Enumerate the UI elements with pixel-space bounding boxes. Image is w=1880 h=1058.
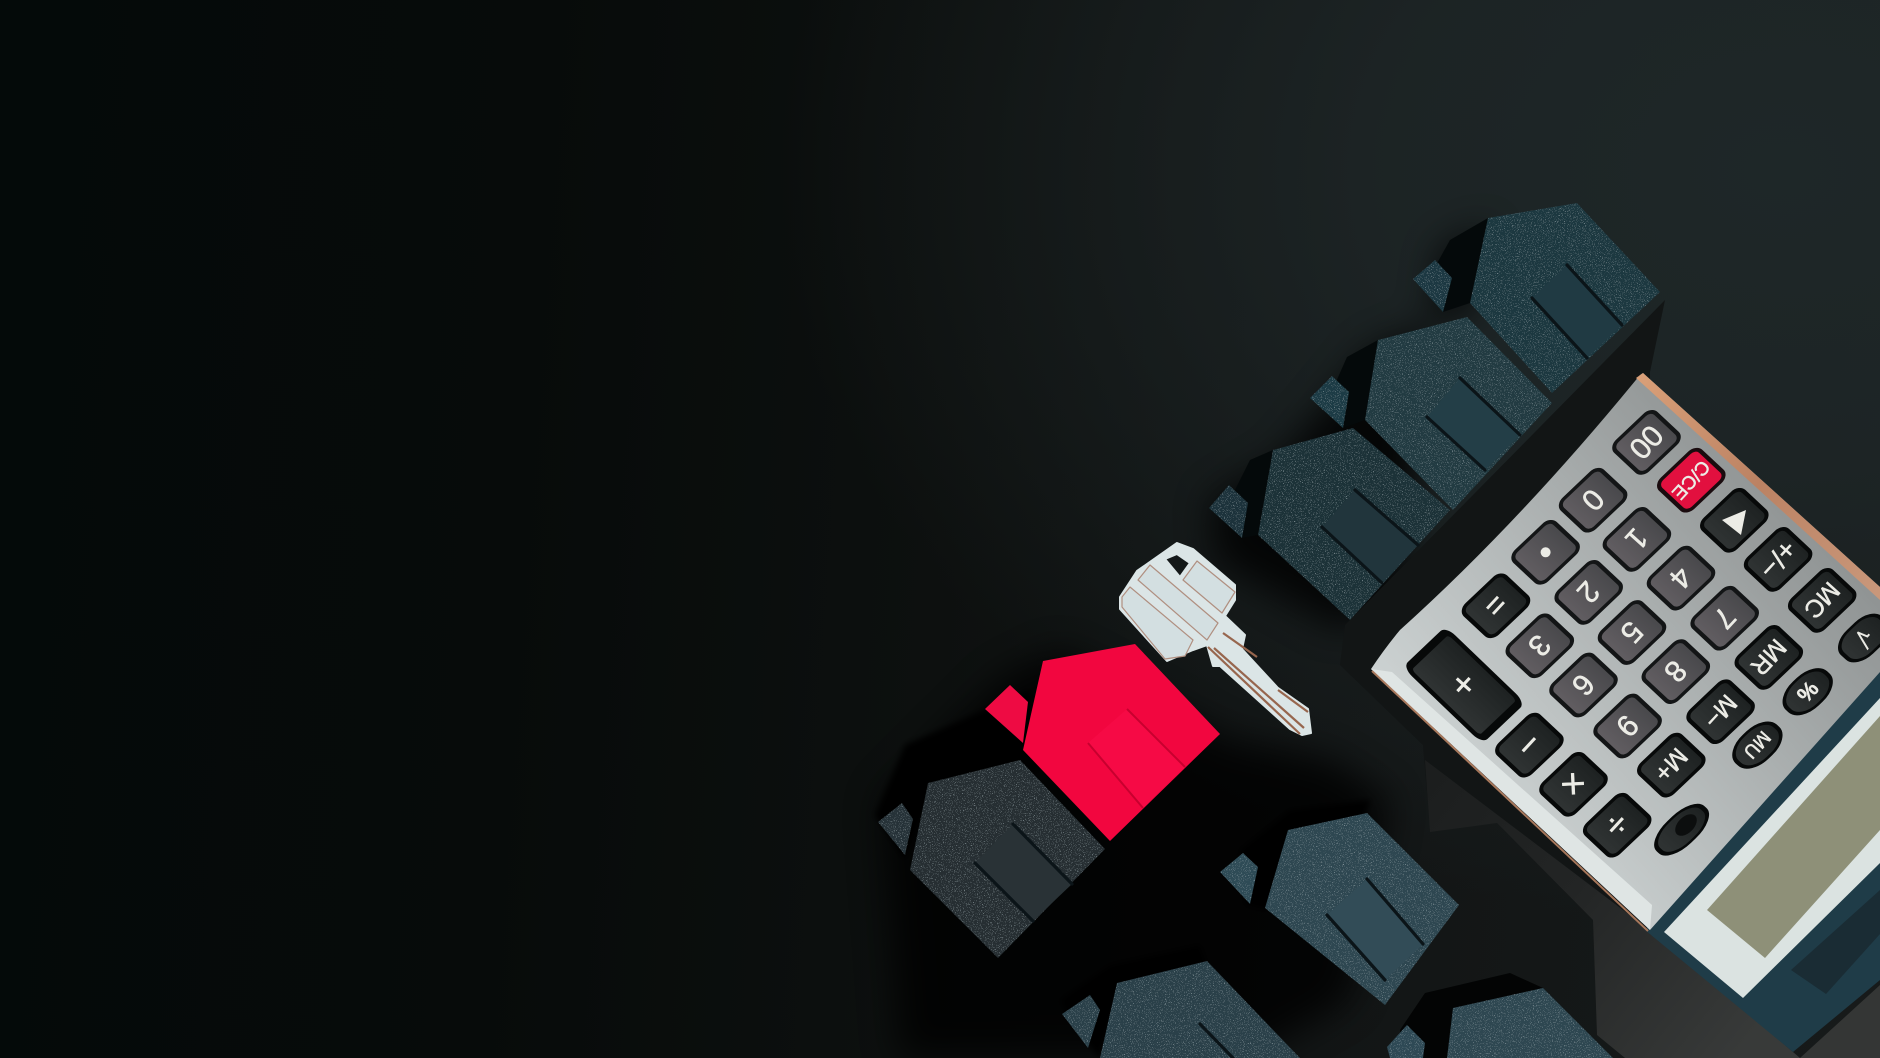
key: divide: ÷ <box>1595 804 1639 846</box>
key: 1: 1 <box>1618 522 1654 556</box>
key: divide <box>1582 792 1653 859</box>
key: 4: 4 <box>1662 560 1698 595</box>
key: 3 <box>1504 612 1575 679</box>
LCD display <box>1707 716 1880 958</box>
key: 1 <box>1601 506 1672 573</box>
model house: bottom centre <box>1062 961 1300 1058</box>
model house: top middle <box>1310 317 1552 510</box>
key: 7 <box>1689 585 1760 652</box>
house shadow: bottom right <box>1400 973 1543 1058</box>
key: MC: MC <box>1798 576 1845 624</box>
key: square root: √ <box>1848 624 1878 652</box>
key: run <box>1699 487 1770 554</box>
model house: middle right <box>1220 813 1459 1005</box>
key: 9: 9 <box>1609 708 1645 742</box>
key: C/CE <box>1656 447 1727 514</box>
model house: top left <box>1209 428 1450 620</box>
table surface under calculator <box>1425 760 1800 1058</box>
key: M- <box>1685 678 1756 745</box>
key: minus: − <box>1507 724 1552 766</box>
key: 5: 5 <box>1613 615 1649 649</box>
house shadow: lower left <box>875 690 1040 860</box>
key: times <box>1538 751 1609 818</box>
key: 8 <box>1640 638 1711 705</box>
display frame <box>1664 698 1880 998</box>
faceplate light lower bevel <box>1371 669 1652 930</box>
key: 9 <box>1592 692 1663 760</box>
key: M-: M− <box>1698 689 1742 734</box>
table surface right of calculator <box>1800 985 1880 1058</box>
key: percent <box>1777 663 1839 721</box>
key: 8: 8 <box>1657 654 1693 688</box>
key: M+: M+ <box>1648 742 1693 787</box>
key: 00: 00 <box>1622 418 1669 465</box>
soft shadows on the surface <box>880 225 1490 1058</box>
key: C/CE: C/CE <box>1667 456 1714 503</box>
model house: lower left dark <box>878 760 1105 958</box>
faceplate copper edge <box>1636 373 1880 600</box>
power switch <box>1649 799 1715 861</box>
house shadow: middle right <box>1240 800 1370 910</box>
key: square root <box>1833 609 1880 667</box>
key: +/-: +/− <box>1753 534 1803 584</box>
model house: bottom right <box>1387 988 1613 1058</box>
key: 00 <box>1611 409 1682 476</box>
key: 5 <box>1596 599 1668 666</box>
key: 0: 0 <box>1574 482 1610 517</box>
key: 6: 6 <box>1565 667 1601 701</box>
key: 4 <box>1646 545 1716 612</box>
model house: red <box>985 644 1220 841</box>
model house: top right <box>1413 203 1660 393</box>
key: times: × <box>1549 761 1596 806</box>
key: decimal point <box>1510 519 1581 586</box>
key: equals: = <box>1476 587 1516 625</box>
key: 7: 7 <box>1706 600 1742 635</box>
key: 6 <box>1548 652 1619 718</box>
key: 2 <box>1553 559 1624 626</box>
key: percent: % <box>1792 676 1823 707</box>
house shadow: bottom <box>1060 945 1207 1058</box>
calculator <box>1371 373 1880 1052</box>
faceplate <box>1371 373 1880 930</box>
key: M+ <box>1636 732 1707 799</box>
solar panel <box>1791 890 1880 994</box>
key: plus <box>1407 630 1521 740</box>
key: minus <box>1494 712 1565 779</box>
key: equals <box>1460 572 1532 639</box>
key: MR: MR <box>1745 633 1792 681</box>
key <box>1120 543 1311 735</box>
key: MU <box>1726 716 1788 774</box>
key: plus: + <box>1442 664 1486 706</box>
key: MR <box>1733 624 1804 691</box>
faceplate bottom edge <box>1372 671 1648 931</box>
key: +/- <box>1743 526 1814 593</box>
calculator lower body <box>1645 660 1880 1052</box>
key: 2: 2 <box>1570 575 1606 609</box>
key: 3: 3 <box>1521 628 1557 662</box>
key: MU: MU <box>1739 726 1774 762</box>
key: 0 <box>1558 467 1629 534</box>
key: MC <box>1787 567 1858 634</box>
dark band between houses and calculator <box>1340 300 1665 1058</box>
